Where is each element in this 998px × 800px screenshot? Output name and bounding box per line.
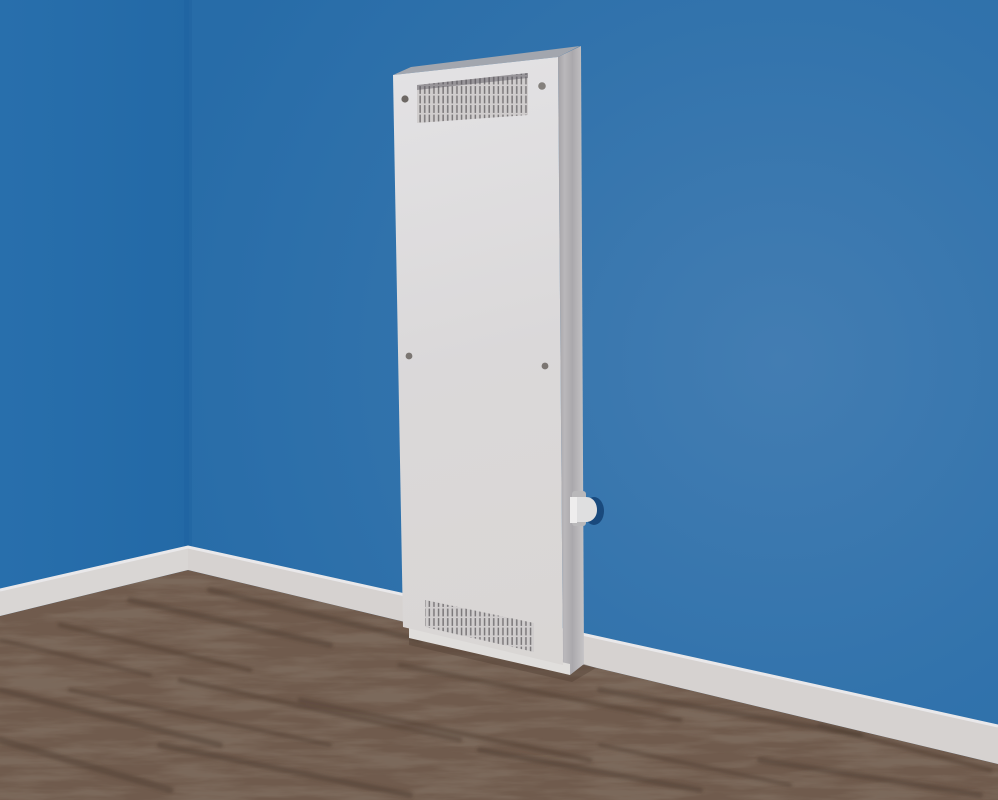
skirting highlight: top edges — [0, 547, 998, 726]
screw: middle right — [542, 363, 548, 369]
left wall — [0, 0, 190, 600]
valve knob — [577, 497, 597, 522]
valve shadow — [584, 497, 604, 525]
wall corner shadow — [184, 0, 192, 548]
valve body — [570, 497, 577, 523]
skirting board: right wall — [188, 546, 998, 764]
radiator side panel — [558, 46, 584, 675]
right wall — [189, 0, 998, 770]
top vent dark edge — [417, 73, 528, 90]
radiator plinth — [409, 628, 570, 675]
screw: middle left — [406, 353, 412, 359]
skirting board: left wall — [0, 546, 188, 616]
floor — [0, 560, 998, 800]
radiator front panel — [393, 57, 563, 665]
top vent grille — [417, 73, 528, 123]
bottom vent grille — [425, 600, 534, 652]
radiator top face — [393, 46, 580, 75]
screw: top left — [401, 95, 409, 103]
radiator cover — [393, 46, 584, 675]
thermostatic valve — [570, 491, 604, 526]
valve mount — [572, 491, 586, 526]
screw: top right — [538, 82, 546, 90]
radiator shadow on floor — [409, 637, 596, 682]
